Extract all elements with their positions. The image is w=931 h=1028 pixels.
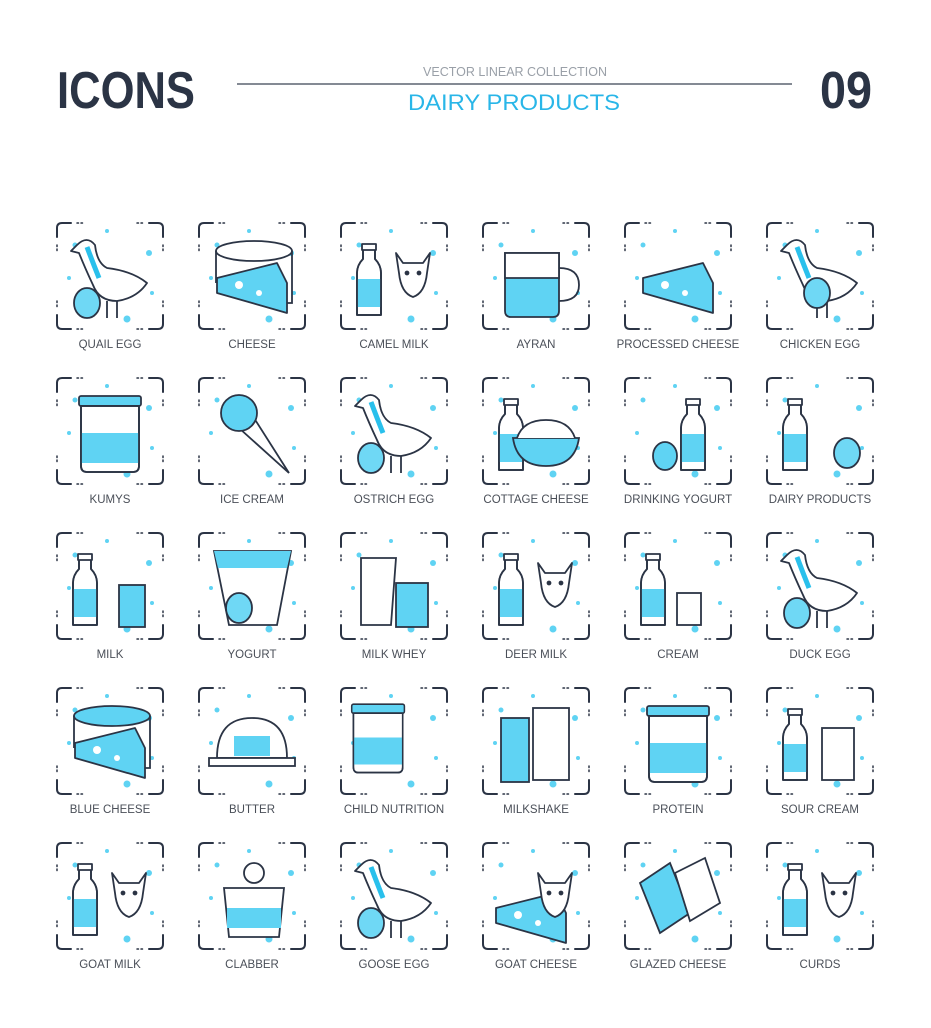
- icon: child nutrition: [341, 688, 447, 794]
- icon: goat cheese: [483, 843, 589, 949]
- icon: ice cream: [199, 378, 305, 484]
- icon: dairy products: [767, 378, 873, 484]
- labels: KUMYS: [90, 494, 131, 506]
- labels: DRINKING YOGURT: [624, 494, 732, 506]
- icon: kumys: [57, 378, 163, 484]
- subtitle: vector linear collection: VECTOR LINEAR COLLECTION: [423, 64, 607, 79]
- icon: cheese: [199, 223, 305, 329]
- labels: MILK: [97, 649, 124, 661]
- labels: ICE CREAM: [220, 494, 284, 506]
- icon: milkshake: [483, 688, 589, 794]
- icon: cream: [625, 533, 731, 639]
- icon: quail egg: [57, 223, 163, 329]
- labels: CREAM: [657, 649, 699, 661]
- labels: CLABBER: [225, 959, 279, 971]
- labels: QUAIL EGG: [79, 339, 141, 351]
- labels: [70, 339, 872, 971]
- icon: protein: [625, 688, 731, 794]
- labels: PROCESSED CHEESE: [617, 339, 740, 351]
- icon: glazed cheese: [625, 843, 731, 949]
- icon: curds: [767, 843, 873, 949]
- labels: GOOSE EGG: [359, 959, 430, 971]
- icon: goat milk: [57, 843, 163, 949]
- labels: MILKSHAKE: [503, 804, 569, 816]
- icon: butter: [199, 688, 305, 794]
- labels: BUTTER: [229, 804, 275, 816]
- labels: YOGURT: [228, 649, 276, 661]
- icon: drinking yogurt: [625, 378, 731, 484]
- icon: ostrich egg: [341, 378, 447, 484]
- icon: deer milk: [483, 533, 589, 639]
- labels: CHILD NUTRITION: [344, 804, 444, 816]
- labels: DUCK EGG: [789, 649, 851, 661]
- labels: CAMEL MILK: [359, 339, 429, 351]
- labels: COTTAGE CHEESE: [483, 494, 589, 506]
- icon: camel milk: [341, 223, 447, 329]
- icon: ayran: [483, 223, 589, 329]
- icon: goose egg: [341, 843, 447, 949]
- labels: DEER MILK: [505, 649, 567, 661]
- icon: milk whey: [341, 533, 447, 639]
- labels: BLUE CHEESE: [70, 804, 151, 816]
- icon: duck egg: [767, 533, 873, 639]
- heading: dairy products: DAIRY PRODUCTS: [408, 90, 620, 115]
- icon: yogurt: [199, 533, 305, 639]
- icon: clabber: [199, 843, 305, 949]
- labels: GLAZED CHEESE: [630, 959, 727, 971]
- labels: PROTEIN: [652, 804, 704, 816]
- labels: CHICKEN EGG: [780, 339, 860, 351]
- icon: cottage cheese: [483, 378, 589, 484]
- icon: milk: [57, 533, 163, 639]
- labels: GOAT CHEESE: [495, 959, 577, 971]
- icon: chicken egg: [767, 223, 873, 329]
- labels: OSTRICH EGG: [354, 494, 434, 506]
- labels: MILK WHEY: [362, 649, 427, 661]
- icon: processed cheese: [625, 223, 731, 329]
- title: ICONS: ICONS: [57, 62, 195, 120]
- labels: CHEESE: [228, 339, 276, 351]
- labels: SOUR CREAM: [781, 804, 859, 816]
- icon: blue cheese: [57, 688, 163, 794]
- labels: AYRAN: [517, 339, 555, 351]
- labels: GOAT MILK: [79, 959, 141, 971]
- labels: CURDS: [800, 959, 841, 971]
- icon: sour cream: [767, 688, 873, 794]
- number 09: 09: [820, 62, 872, 120]
- labels: DAIRY PRODUCTS: [769, 494, 872, 506]
